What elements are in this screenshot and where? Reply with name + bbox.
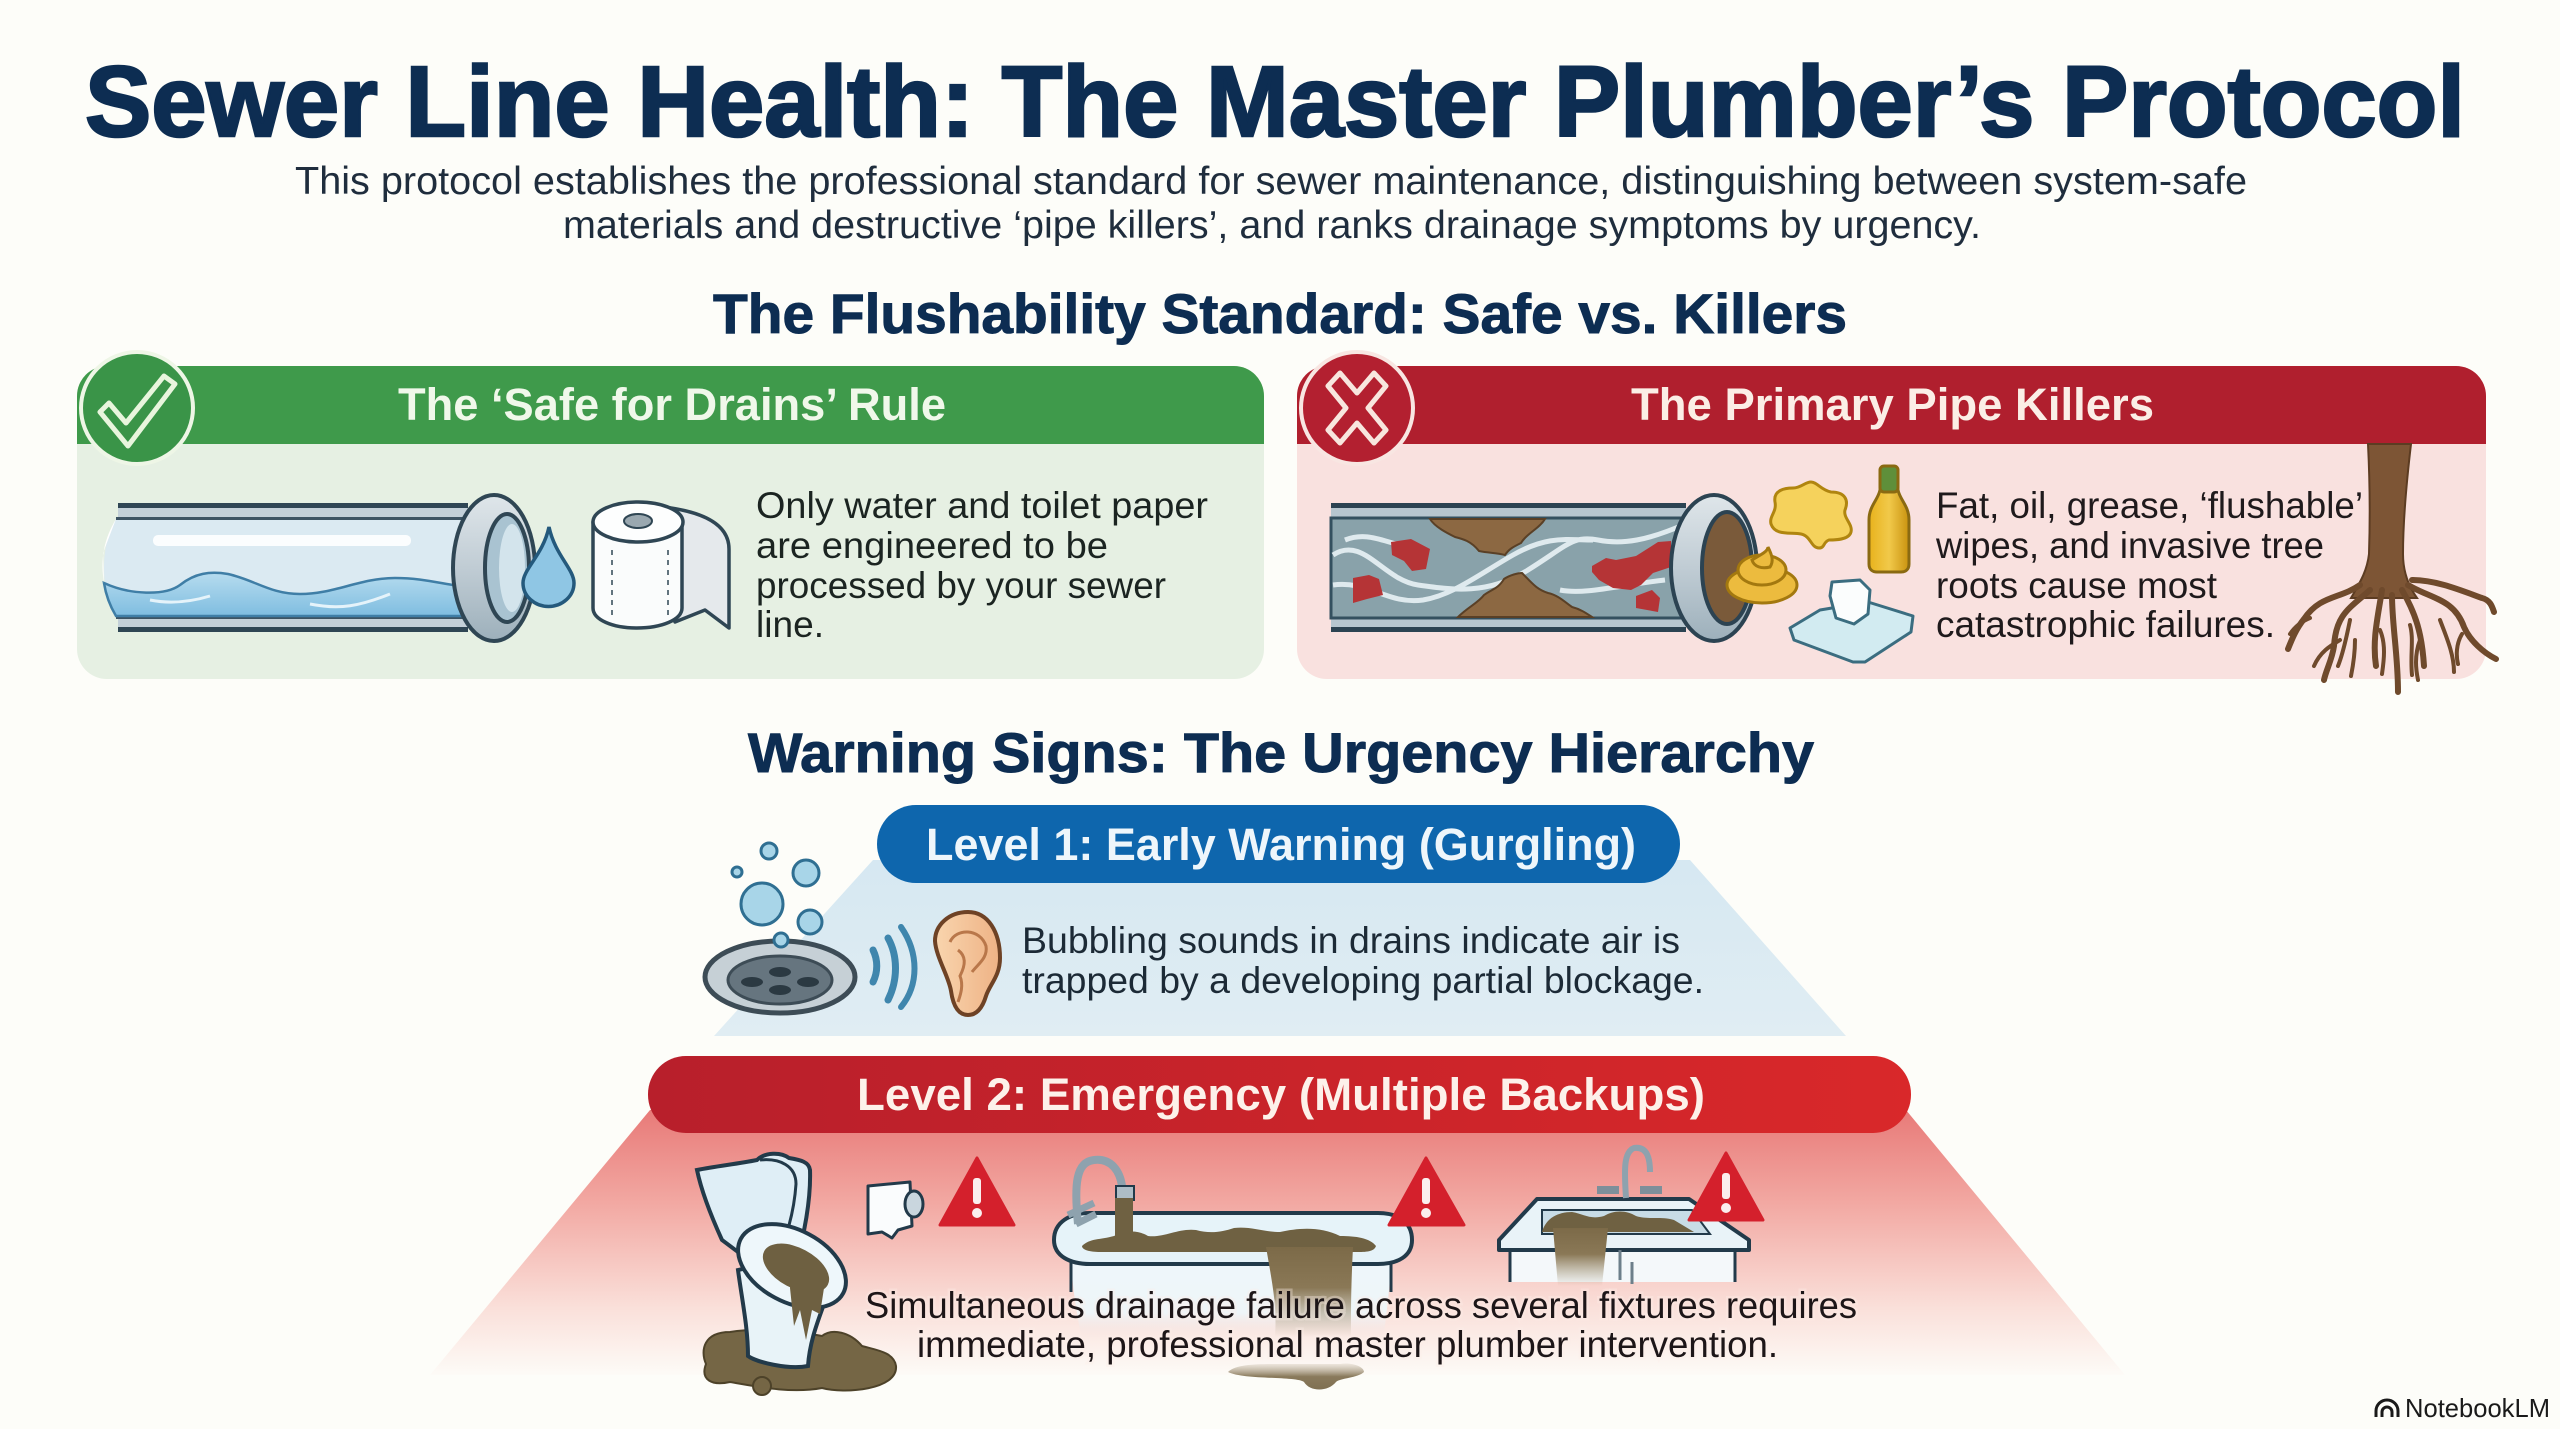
icon: bubbling drain bbox=[705, 843, 855, 1013]
killers panel heading: The Primary Pipe Killers bbox=[1631, 379, 2154, 430]
icon: clean water pipe bbox=[102, 495, 535, 641]
panel: pipe killers bbox=[1297, 352, 2496, 692]
level 2 text: Simultaneous drainage failure across several fixtures requires bbox=[865, 1285, 1857, 1326]
level 1 pill bbox=[877, 805, 1680, 883]
intro text bbox=[295, 160, 2247, 247]
icon: warning triangle 2 bbox=[1389, 1158, 1464, 1225]
panel: level 2 emergency bbox=[430, 1056, 2125, 1395]
panel: level 1 early warning bbox=[705, 805, 1846, 1036]
level 2 text: immediate, professional master plumber intervention. bbox=[917, 1324, 1778, 1365]
panel: safe for drains bbox=[77, 352, 1264, 679]
icon: overflowing bathtub bbox=[1054, 1160, 1412, 1390]
killers text: wipes, and invasive tree bbox=[1935, 525, 2324, 566]
level 1 text: trapped by a developing partial blockage. bbox=[1022, 960, 1704, 1001]
icon: overflowing sink bbox=[1499, 1148, 1749, 1286]
watermark: NotebookLM: NotebookLM bbox=[2405, 1393, 2550, 1423]
safe rule text bbox=[756, 485, 1208, 645]
level 2 pill bbox=[648, 1056, 1911, 1133]
killers text: roots cause most bbox=[1936, 565, 2218, 606]
killers text: Fat, oil, grease, ‘flushable’ bbox=[1936, 485, 2363, 526]
icon: wet wipes pack bbox=[1790, 580, 1913, 662]
intro text: This protocol establishes the professional standard for sewer maintenance, distinguishing between system-safe bbox=[295, 160, 2247, 203]
icon: tree roots bbox=[2288, 444, 2496, 692]
safe panel header bar bbox=[77, 366, 1264, 444]
intro text: materials and destructive ‘pipe killers’, and ranks drainage symptoms by urgency. bbox=[563, 204, 1981, 247]
level 2 text bbox=[865, 1285, 1857, 1365]
safe rule text: processed by your sewer bbox=[756, 565, 1166, 606]
level 1 text: Bubbling sounds in drains indicate air is bbox=[1022, 920, 1680, 961]
safe rule text: line. bbox=[756, 604, 824, 645]
level 1 heading: Level 1: Early Warning (Gurgling) bbox=[926, 819, 1636, 870]
icon: grease splat bbox=[1771, 482, 1851, 548]
icon: ear bbox=[935, 912, 1000, 1015]
safe rule text: Only water and toilet paper bbox=[756, 485, 1208, 526]
icon: warning triangle 1 bbox=[940, 1158, 1014, 1225]
icon: sound waves bbox=[873, 927, 914, 1007]
icon: water drop bbox=[523, 527, 574, 606]
icon: clogged pipe bbox=[1331, 495, 1757, 641]
safe panel heading: The ‘Safe for Drains’ Rule bbox=[398, 379, 946, 430]
icon: warning triangle 3 bbox=[1689, 1153, 1763, 1220]
safe rule text: are engineered to be bbox=[756, 525, 1108, 566]
section heading: flushability standard: The Flushability Standard: Safe vs. Killers bbox=[713, 282, 1847, 345]
icon: fat blob bbox=[1727, 547, 1797, 603]
title: Sewer Line Health: The Master Plumber’s Protocol bbox=[85, 46, 2465, 158]
icon: check mark badge bbox=[81, 352, 193, 464]
section heading: warning signs: Warning Signs: The Urgency Hierarchy bbox=[748, 721, 1814, 784]
icon: oil bottle bbox=[1869, 466, 1909, 572]
icon: toilet paper bbox=[868, 1182, 923, 1238]
killers panel header bar bbox=[1297, 366, 2486, 444]
killers text: catastrophic failures. bbox=[1936, 604, 2275, 645]
level 1 text bbox=[1022, 920, 1704, 1001]
icon: x mark badge bbox=[1301, 352, 1413, 464]
killers text bbox=[1935, 485, 2363, 645]
icon: overflowing toilet bbox=[697, 1154, 896, 1395]
level 2 heading: Level 2: Emergency (Multiple Backups) bbox=[857, 1069, 1705, 1120]
icon: toilet paper roll bbox=[593, 502, 729, 628]
